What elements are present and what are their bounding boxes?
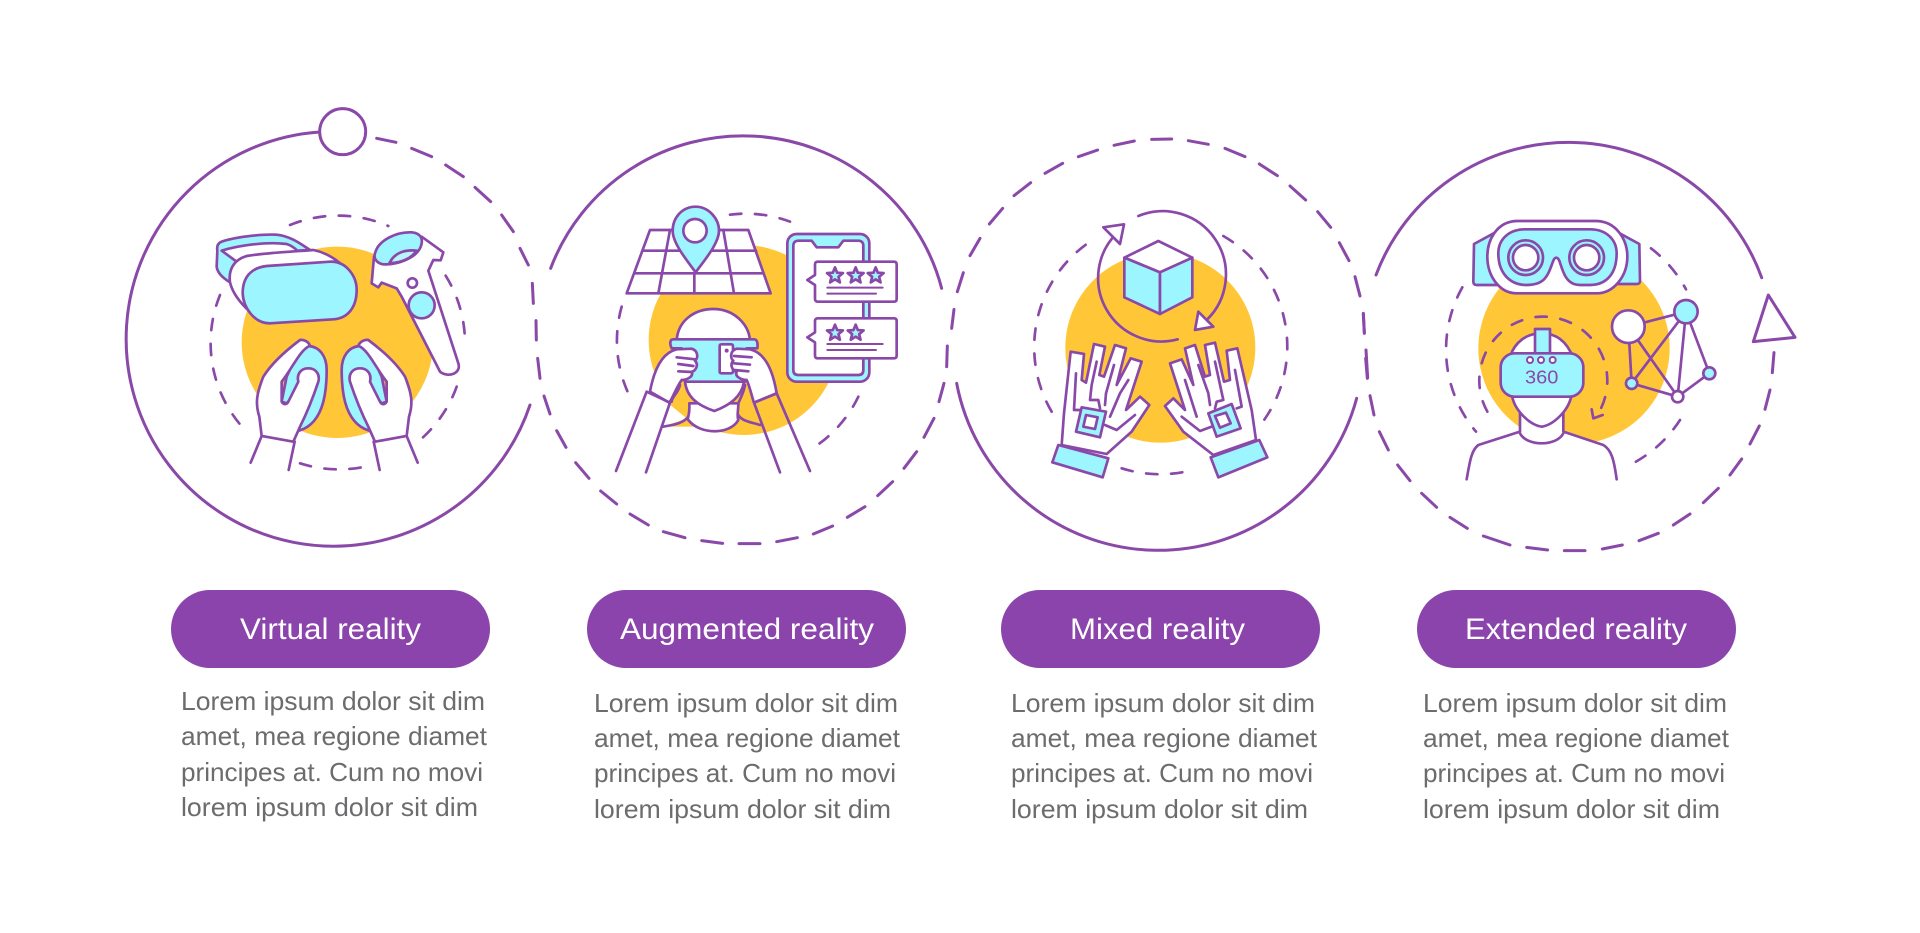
text block: Virtual reality description: principes at. Cum no movi — [181, 757, 483, 787]
text block: Mixed reality description: lorem ipsum dolor sit dim — [1011, 794, 1308, 824]
pill heading: Extended reality — [1417, 590, 1736, 668]
text block: Augmented reality description: lorem ipsum dolor sit dim — [594, 794, 891, 824]
text block: Mixed reality description — [1011, 688, 1318, 824]
pill heading: Augmented reality — [587, 590, 906, 668]
text block: Extended reality description — [1423, 688, 1730, 824]
icon: right hand on controller — [342, 340, 418, 470]
icon: left haptic glove — [1052, 344, 1149, 477]
pill heading: Mixed reality — [1001, 590, 1320, 668]
headset label: 360: 360 — [1525, 366, 1558, 387]
arrow: rotation cycle — [1098, 211, 1226, 341]
icon: person holding smartphone — [616, 309, 810, 472]
pill heading: Virtual reality: Virtual reality — [240, 613, 421, 646]
panel: extended reality illustration — [1363, 142, 1795, 551]
icon: 3D cube — [1124, 241, 1192, 314]
text block: Virtual reality description — [181, 686, 488, 822]
text block: Extended reality description: amet, mea regione diamet — [1423, 723, 1730, 753]
text block: Extended reality description: principes at. Cum no movi — [1423, 758, 1725, 788]
icon: VR headset — [217, 235, 357, 323]
text block: Virtual reality description: lorem ipsum dolor sit dim — [181, 792, 478, 822]
icon: VR controller — [372, 232, 459, 375]
icon: left hand on controller — [251, 340, 327, 470]
yellow backdrop circle — [649, 245, 839, 435]
inner dashed ring — [211, 216, 465, 469]
inner dashed ring — [1034, 236, 1287, 474]
yellow backdrop circle — [1478, 253, 1670, 444]
panel: augmented reality illustration — [532, 136, 944, 544]
text block: Augmented reality description: Lorem ipsum dolor sit dim — [594, 688, 898, 718]
outer ring: extended reality — [1363, 142, 1774, 551]
text block: Augmented reality description: principes at. Cum no movi — [594, 758, 896, 788]
text block: Extended reality description: lorem ipsum dolor sit dim — [1423, 794, 1720, 824]
pill heading: Mixed reality: Mixed reality — [1070, 613, 1245, 646]
text block: Extended reality description: Lorem ipsum dolor sit dim — [1423, 688, 1727, 718]
yellow backdrop circle — [1065, 253, 1255, 443]
text block: Mixed reality description: amet, mea regione diamet — [1011, 723, 1318, 753]
icon: person wearing 360 headset — [1467, 329, 1617, 479]
outer ring: augmented reality — [532, 136, 944, 544]
end marker triangle — [1753, 295, 1795, 342]
pill heading: Virtual reality — [171, 590, 490, 668]
text block: Mixed reality description: principes at. Cum no movi — [1011, 758, 1313, 788]
icon: map with location pin — [627, 207, 771, 293]
icon: phone with rating reviews — [787, 234, 897, 382]
panel: virtual reality illustration — [126, 109, 530, 546]
icon: VR goggles — [1473, 221, 1640, 293]
text block: Virtual reality description: amet, mea regione diamet — [181, 721, 488, 751]
pill heading: Augmented reality: Augmented reality — [620, 613, 874, 646]
panel: mixed reality illustration — [947, 139, 1368, 550]
outer ring: virtual reality — [126, 132, 530, 546]
inner dashed ring — [617, 214, 858, 447]
text block: Virtual reality description: Lorem ipsum dolor sit dim — [181, 686, 485, 716]
yellow backdrop circle — [242, 247, 433, 438]
outer ring: mixed reality — [947, 139, 1368, 550]
inner dashed ring — [1446, 248, 1686, 466]
start marker circle — [320, 109, 366, 155]
icon: network nodes — [1612, 300, 1715, 402]
text block: Augmented reality description — [594, 688, 901, 824]
arrow: circular dashed 360 rotation — [1479, 317, 1607, 418]
pill heading: Extended reality: Extended reality — [1465, 613, 1687, 646]
text block: Augmented reality description: amet, mea regione diamet — [594, 723, 901, 753]
text block: Mixed reality description: Lorem ipsum dolor sit dim — [1011, 688, 1315, 718]
icon: right haptic glove — [1165, 343, 1267, 477]
